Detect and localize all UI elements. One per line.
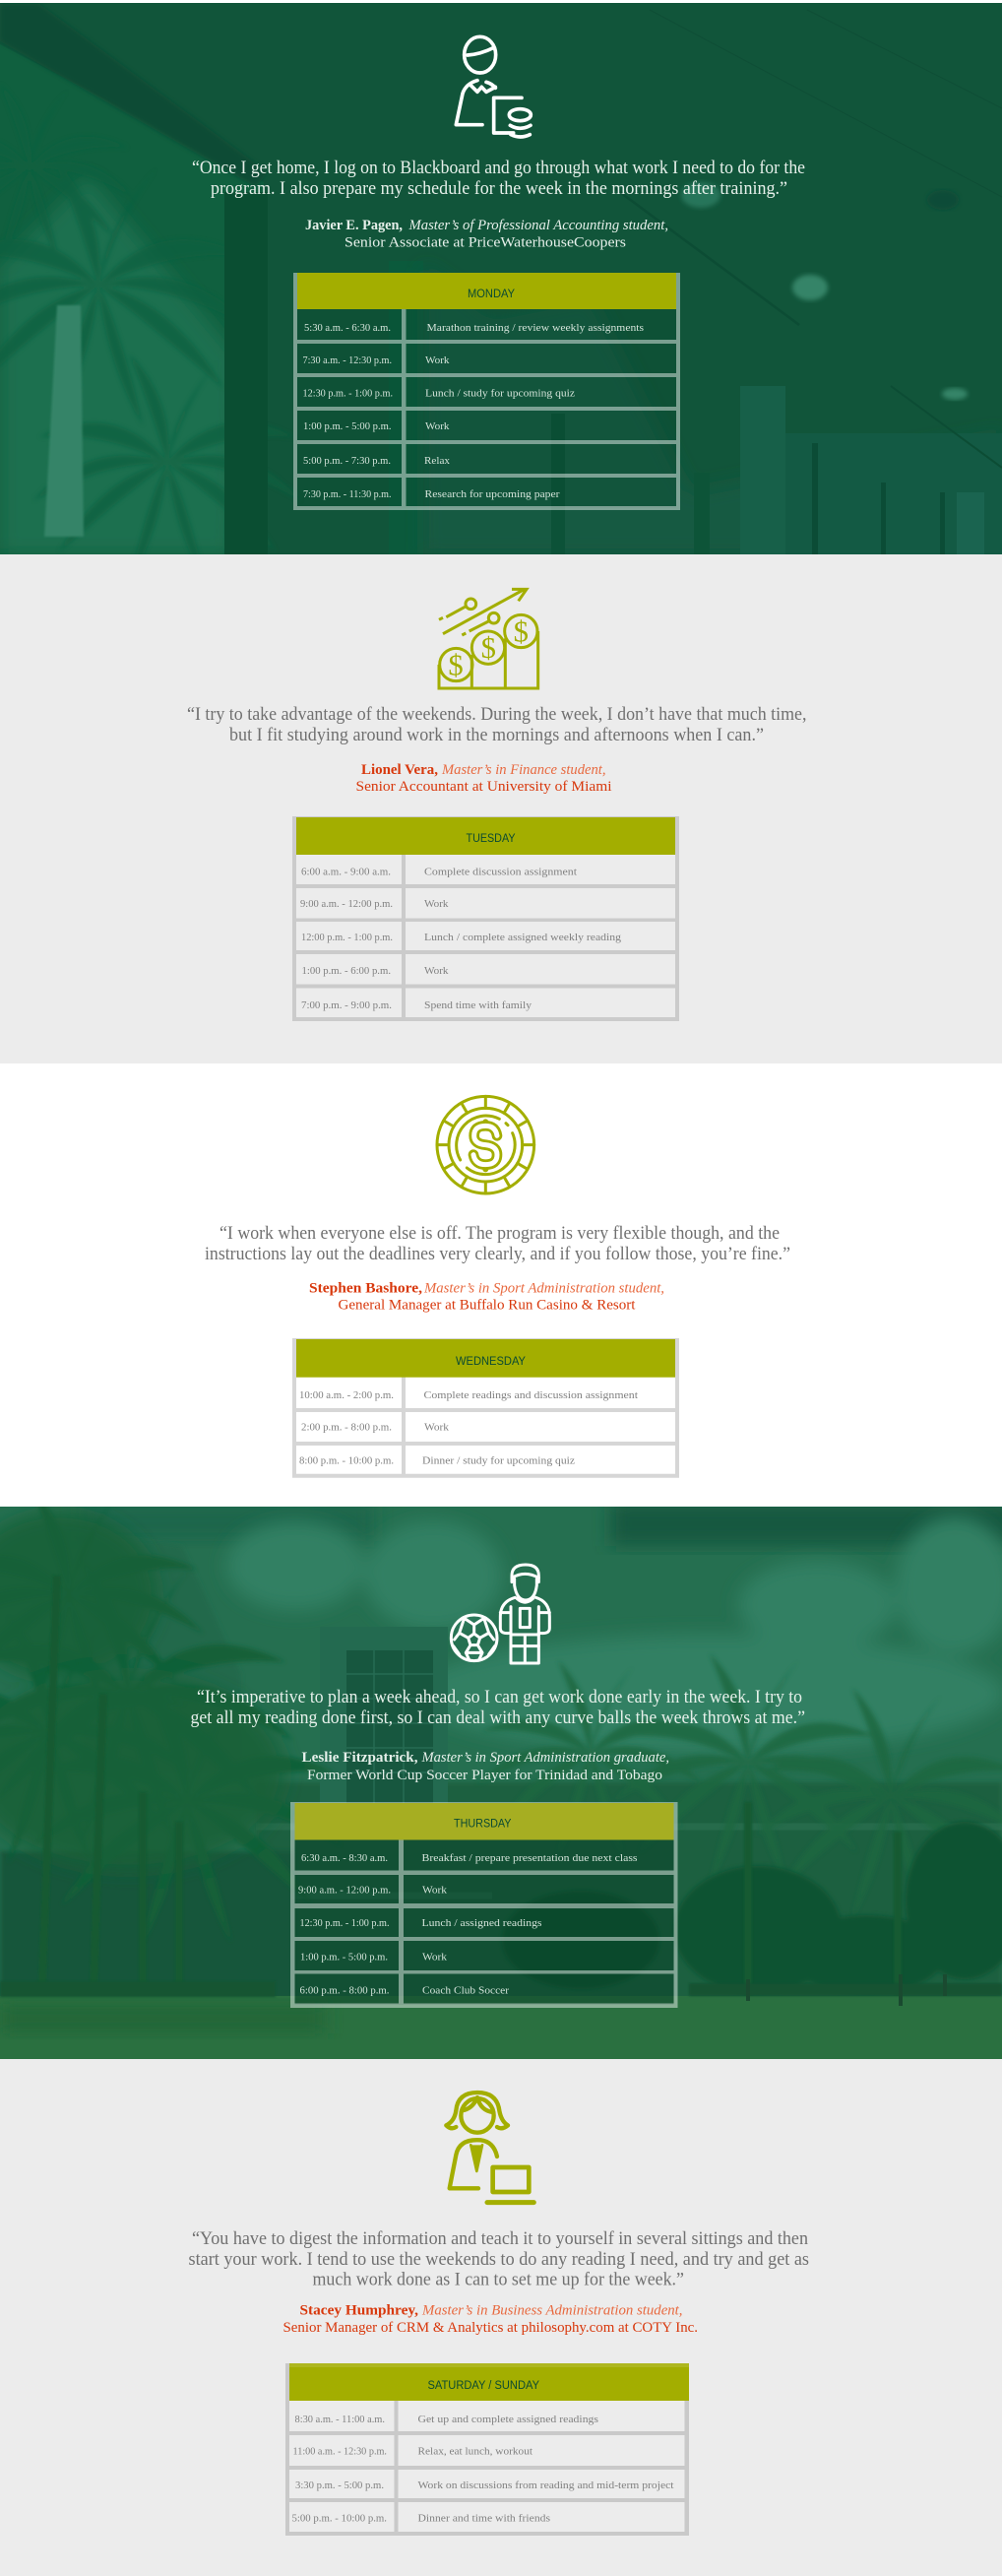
icon: casino chip xyxy=(437,1096,534,1193)
table rows: 6:00 a.m. - 9:00 a.m. xyxy=(301,867,391,878)
quote xyxy=(191,1688,805,1728)
attribution: Senior Associate at PriceWaterhouseCoopers xyxy=(344,234,626,250)
table rows: 5:30 a.m. - 6:30 a.m. xyxy=(304,322,391,334)
attribution xyxy=(305,218,668,250)
table rows: 12:00 p.m. - 1:00 p.m. xyxy=(301,932,393,943)
table rows: 7:30 a.m. - 12:30 p.m. xyxy=(303,354,392,366)
table rows: 5:00 p.m. - 7:30 p.m. xyxy=(303,455,391,467)
table header xyxy=(297,273,676,309)
table rows: Complete discussion assignment xyxy=(424,867,577,878)
table header xyxy=(296,1339,675,1378)
attribution: Stacey Humphrey, xyxy=(299,2302,418,2318)
attribution: Senior Accountant at University of Miami xyxy=(356,779,612,795)
table header: SATURDAY / SUNDAY xyxy=(427,2380,539,2392)
table rows xyxy=(298,1852,638,1997)
quote: “I try to take advantage of the weekends. During the week, I don’t have that much time, xyxy=(187,705,807,725)
table rows: 8:30 a.m. - 11:00 a.m. xyxy=(295,2414,385,2425)
table rows: 6:30 a.m. - 8:30 a.m. xyxy=(301,1852,388,1864)
attribution: Stephen Bashore, xyxy=(309,1280,422,1296)
table rows: Lunch / complete assigned weekly reading xyxy=(424,932,622,943)
panel: Monday xyxy=(0,3,1002,585)
table rows: Spend time with family xyxy=(424,999,532,1011)
schedule table: Tuesday xyxy=(292,816,679,1021)
table rows: Complete readings and discussion assignment xyxy=(423,1389,638,1401)
attribution: Master’s in Sport Administration student, xyxy=(423,1280,664,1296)
quote: “Once I get home, I log on to Blackboard and go through what work I need to do for the xyxy=(192,159,805,178)
quote: “It’s imperative to plan a week ahead, so I can get work done early in the week. I try to xyxy=(197,1688,802,1707)
table header: WEDNESDAY xyxy=(456,1356,526,1368)
table rows: Work xyxy=(424,1422,450,1434)
table rows: Dinner and time with friends xyxy=(417,2513,550,2525)
table rows: 7:00 p.m. - 9:00 p.m. xyxy=(301,999,392,1011)
table rows: 12:30 p.m. - 1:00 p.m. xyxy=(299,1917,390,1929)
panel: Saturday and Sunday xyxy=(0,2059,1002,2576)
table rows: Lunch / assigned readings xyxy=(421,1917,541,1929)
quote xyxy=(192,159,805,199)
table header: MONDAY xyxy=(468,289,515,300)
quote: “You have to digest the information and teach it to yourself in several sittings and then xyxy=(192,2229,808,2249)
quote: “I work when everyone else is off. The program is very flexible though, and the xyxy=(219,1224,780,1244)
icon: woman at laptop xyxy=(446,2093,533,2203)
table rows: Relax xyxy=(424,455,450,467)
schedule table: Monday xyxy=(293,273,680,510)
table rows xyxy=(303,322,644,500)
table rows: 5:00 p.m. - 10:00 p.m. xyxy=(291,2513,387,2525)
schedule table: Wednesday xyxy=(292,1338,679,1478)
attribution: Master’s of Professional Accounting student, xyxy=(408,218,668,233)
attribution: Javier E. Pagen, xyxy=(305,218,403,233)
table rows: Work xyxy=(425,420,450,432)
table rows: Work xyxy=(422,1885,448,1897)
icon: rising coins chart: $ xyxy=(481,631,496,665)
table rows: Work xyxy=(425,354,450,366)
table rows: 3:30 p.m. - 5:00 p.m. xyxy=(295,2479,384,2491)
table header: THURSDAY xyxy=(454,1818,512,1830)
table rows: 10:00 a.m. - 2:00 p.m. xyxy=(299,1389,394,1401)
table rows: Work on discussions from reading and mid-term project xyxy=(417,2479,673,2491)
table rows: Research for upcoming paper xyxy=(425,488,560,500)
attribution xyxy=(356,762,612,795)
photo background: campus interior xyxy=(0,3,1002,585)
schedule table: Saturday and Sunday xyxy=(285,2363,689,2536)
icon: rising coins chart: $ xyxy=(514,614,529,648)
panel: Tuesday xyxy=(0,554,1002,1063)
table rows: Lunch / study for upcoming quiz xyxy=(425,388,575,400)
attribution: Senior Manager of CRM & Analytics at philosophy.com at COTY Inc. xyxy=(283,2320,698,2336)
table rows: 8:00 p.m. - 10:00 p.m. xyxy=(299,1455,394,1467)
table rows: 11:00 a.m. - 12:30 p.m. xyxy=(293,2446,387,2458)
table rows: Relax, eat lunch, workout xyxy=(417,2446,532,2458)
photo background: campus palms and building xyxy=(0,1487,1002,2059)
attribution xyxy=(309,1280,664,1314)
table rows: Get up and complete assigned readings xyxy=(417,2414,598,2425)
quote: start your work. I tend to use the weekends to do any reading I need, and try and get as xyxy=(189,2250,809,2270)
table header xyxy=(295,1803,673,1839)
table rows: 1:00 p.m. - 6:00 p.m. xyxy=(301,965,391,977)
quote xyxy=(189,2229,809,2290)
table header xyxy=(289,2363,689,2401)
table rows: 1:00 p.m. - 5:00 p.m. xyxy=(303,420,392,432)
table rows: Work xyxy=(424,898,449,910)
attribution: Master’s in Finance student, xyxy=(441,762,606,778)
table rows: 7:30 p.m. - 11:30 p.m. xyxy=(303,488,392,500)
quote xyxy=(187,705,807,745)
attribution: Master’s in Business Administration student, xyxy=(421,2302,683,2318)
schedule table: Thursday xyxy=(290,1802,677,2008)
attribution xyxy=(301,1750,669,1783)
icon: rising coins chart: $ xyxy=(448,648,464,681)
panel: Wednesday xyxy=(0,1063,1002,1507)
quote: program. I also prepare my schedule for the week in the mornings after training.” xyxy=(211,179,787,199)
icon: soccer player and ball xyxy=(451,1565,549,1663)
quote: instructions lay out the deadlines very clearly, and if you follow those, you’re fine.” xyxy=(205,1245,790,1264)
table rows xyxy=(291,2414,673,2525)
attribution: Former World Cup Soccer Player for Trinidad and Tobago xyxy=(307,1768,662,1783)
icon: rising coins chart xyxy=(439,589,538,688)
table rows: 1:00 p.m. - 5:00 p.m. xyxy=(300,1952,388,1964)
table rows: Work xyxy=(422,1952,448,1964)
attribution: Lionel Vera, xyxy=(361,762,438,778)
table rows: Marathon training / review weekly assignments xyxy=(427,322,644,334)
attribution: Master’s in Sport Administration graduate, xyxy=(421,1750,669,1766)
quote: get all my reading done first, so I can deal with any curve balls the week throws at me.” xyxy=(191,1708,805,1728)
table rows: Breakfast / prepare presentation due next class xyxy=(421,1852,638,1864)
table rows: 12:30 p.m. - 1:00 p.m. xyxy=(303,388,393,400)
table header xyxy=(296,817,675,855)
attribution: General Manager at Buffalo Run Casino & Resort xyxy=(339,1298,636,1314)
quote: much work done as I can to set me up for the week.” xyxy=(313,2271,684,2290)
table rows: 6:00 p.m. - 8:00 p.m. xyxy=(299,1985,390,1997)
quote xyxy=(205,1224,790,1264)
attribution xyxy=(283,2302,698,2336)
table rows: Work xyxy=(424,965,449,977)
table rows: 9:00 a.m. - 12:00 p.m. xyxy=(298,1885,391,1897)
icon: accountant with coins xyxy=(456,36,531,137)
table rows xyxy=(299,1389,638,1467)
panel: Thursday xyxy=(0,1487,1002,2059)
table rows: 2:00 p.m. - 8:00 p.m. xyxy=(301,1422,392,1434)
table rows: Coach Club Soccer xyxy=(422,1985,509,1997)
quote: but I fit studying around work in the mornings and afternoons when I can.” xyxy=(229,726,764,745)
table rows xyxy=(300,867,622,1011)
table rows: Dinner / study for upcoming quiz xyxy=(422,1455,575,1467)
table rows: 9:00 a.m. - 12:00 p.m. xyxy=(300,898,393,910)
attribution: Leslie Fitzpatrick, xyxy=(301,1750,418,1766)
table header: TUESDAY xyxy=(467,833,516,845)
